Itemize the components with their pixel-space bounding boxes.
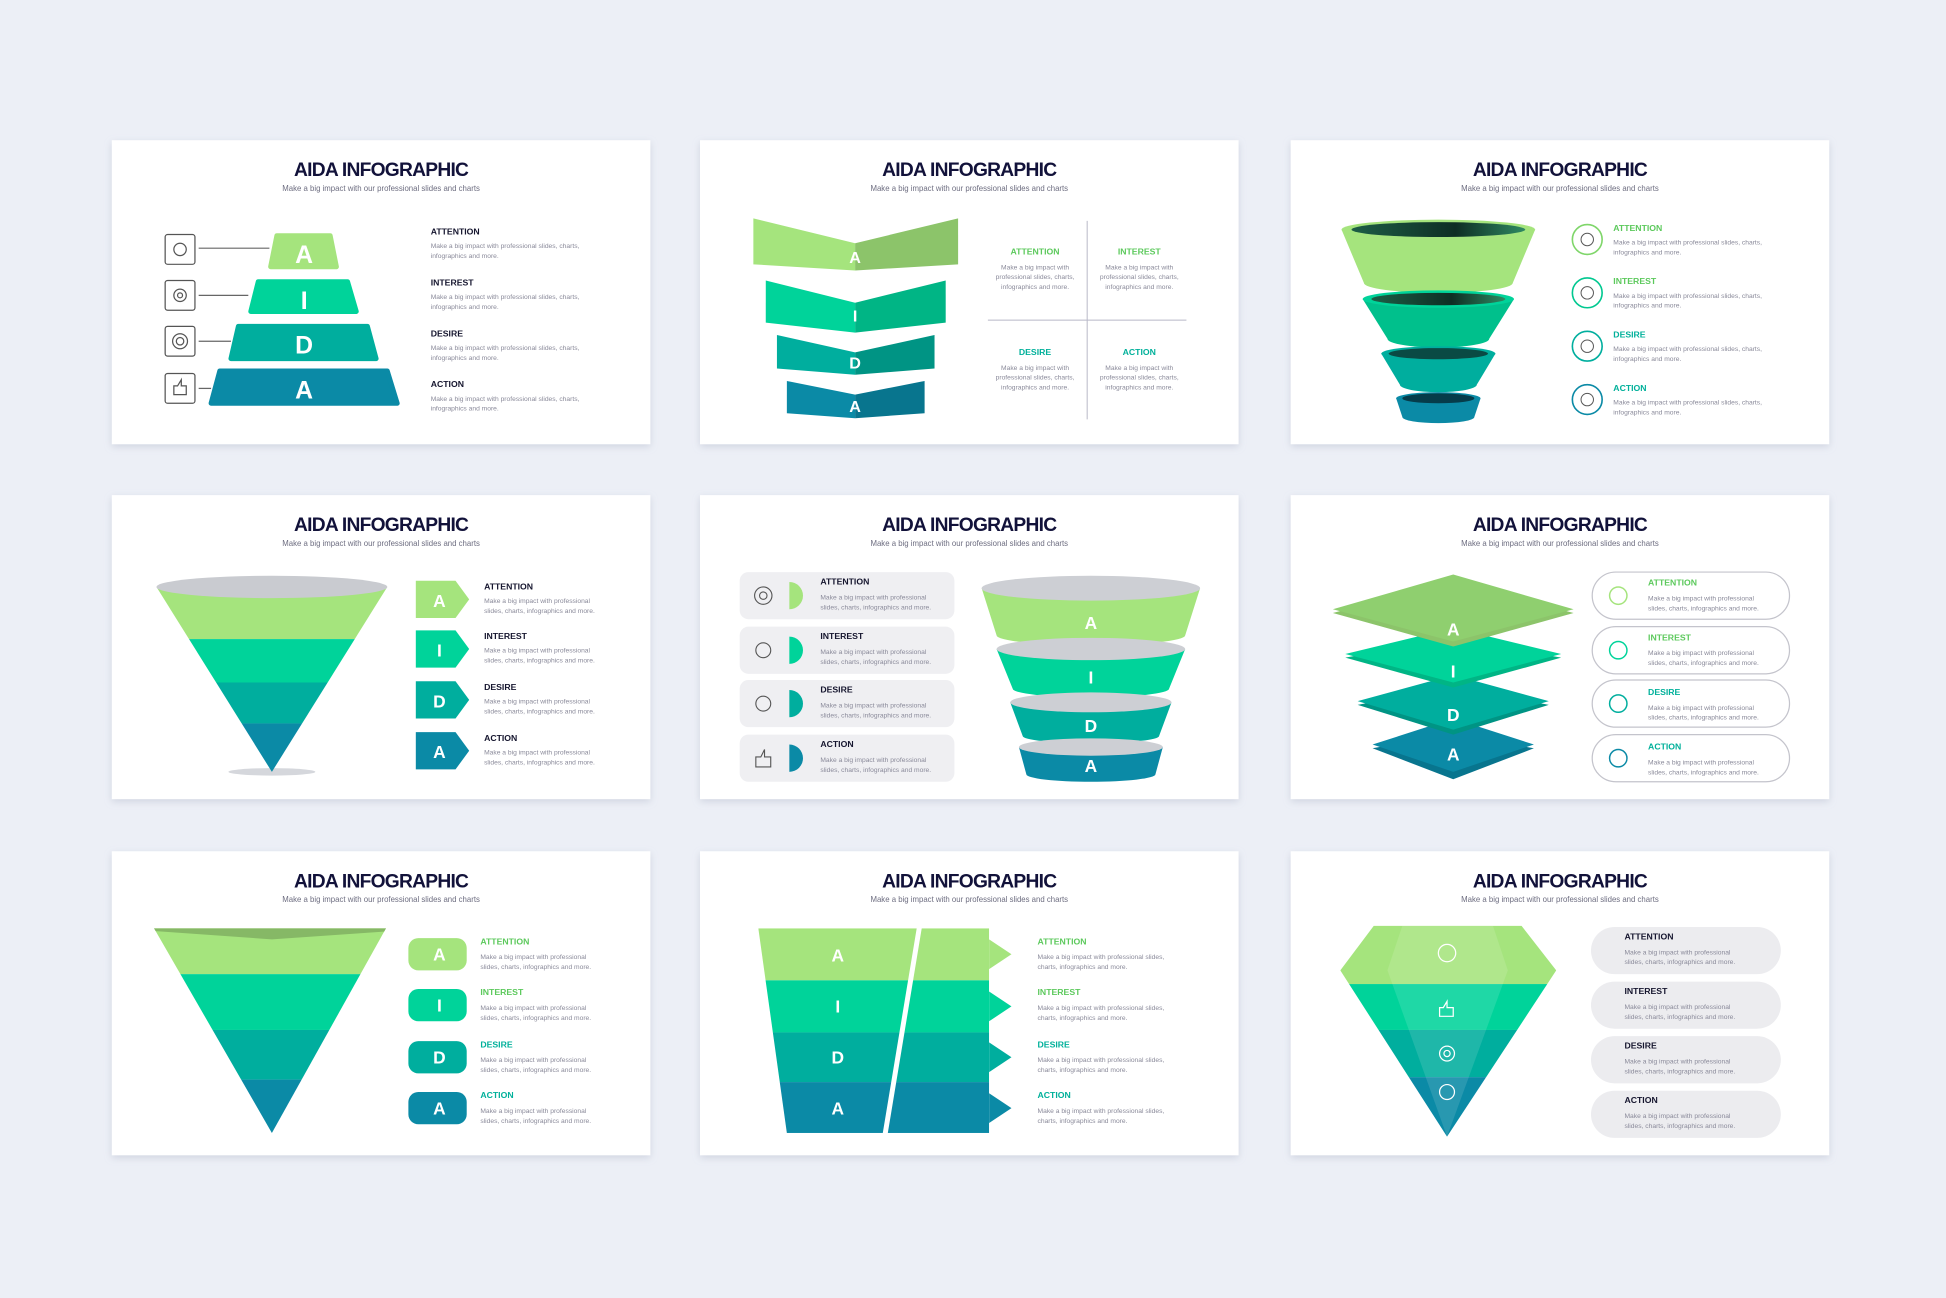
- text list: INTEREST: [484, 631, 528, 641]
- pill list: DESIRE: [1648, 687, 1681, 697]
- text list: ATTENTION: [431, 227, 480, 237]
- diamonds: D: [1447, 705, 1460, 725]
- grid text: Make a big impact with: [1105, 365, 1174, 372]
- text list: ACTION: [431, 379, 464, 389]
- grid text: INTEREST: [1118, 246, 1161, 256]
- subtitle: Make a big impact with our professional slides and charts: [282, 184, 480, 193]
- diamonds: I: [1451, 662, 1456, 682]
- folded bands: D: [849, 355, 861, 373]
- trapezoid with arrows: A: [831, 1098, 844, 1118]
- grid text: [996, 246, 1179, 392]
- subtitle: Make a big impact with our professional slides and charts: [1461, 184, 1659, 193]
- grid text: ACTION: [1123, 347, 1156, 357]
- pyramid layers: A: [295, 242, 313, 269]
- text list: DESIRE: [480, 1039, 513, 1049]
- pill list: slides, charts, infographics and more.: [1648, 660, 1759, 667]
- text list: Make a big impact with professional slides, charts,: [431, 294, 580, 301]
- pill list: INTEREST: [1624, 986, 1668, 996]
- text list: slides, charts, infographics and more.: [484, 759, 595, 766]
- icons and text: Make a big impact with professional slides, charts,: [1613, 400, 1762, 407]
- triangle: [149, 924, 397, 1135]
- subtitle: Make a big impact with our professional slides and charts: [870, 539, 1068, 548]
- diamonds: A: [1447, 619, 1460, 639]
- text list: Make a big impact with professional: [484, 598, 591, 605]
- title: AIDA INFOGRAPHIC: [294, 871, 469, 892]
- text list: slides, charts, infographics and more.: [484, 658, 595, 665]
- cups: [1342, 220, 1535, 423]
- panel: shield: [1291, 851, 1829, 1155]
- text list: DESIRE: [484, 682, 517, 692]
- arrow tags: A: [433, 591, 446, 611]
- disc stack: A: [1085, 756, 1098, 776]
- panel: stacked discs: [700, 495, 1239, 799]
- title: AIDA INFOGRAPHIC: [294, 160, 469, 181]
- text list: ACTION: [484, 733, 517, 743]
- subtitle: Make a big impact with our professional slides and charts: [282, 539, 480, 548]
- text list: infographics and more.: [431, 304, 499, 311]
- diamonds: A: [1447, 745, 1460, 765]
- panel: diamond layers: [1291, 495, 1829, 799]
- pyramid layers: A: [295, 377, 313, 404]
- icons and text: infographics and more.: [1613, 356, 1681, 363]
- text list: ACTION: [480, 1090, 514, 1100]
- text list: INTEREST: [480, 987, 524, 997]
- disc stack: [982, 576, 1200, 782]
- text list: Make a big impact with professional slides, charts,: [431, 243, 580, 250]
- text list: INTEREST: [431, 277, 474, 287]
- tags: A: [433, 944, 446, 964]
- text list: Make a big impact with professional: [480, 954, 587, 961]
- grid text: infographics and more.: [1105, 385, 1173, 392]
- grid lines: [988, 221, 1186, 419]
- text list: Make a big impact with professional slides,: [1038, 1005, 1164, 1012]
- icons and text: infographics and more.: [1613, 303, 1681, 310]
- folded bands: A: [849, 249, 861, 267]
- pill list: slides, charts, infographics and more.: [1624, 1123, 1735, 1130]
- text list: slides, charts, infographics and more.: [484, 608, 595, 615]
- shield: [1334, 923, 1564, 1139]
- pill list: slides, charts, infographics and more.: [1648, 769, 1759, 776]
- pill list: Make a big impact with professional: [1648, 759, 1755, 766]
- text list: infographics and more.: [431, 406, 499, 413]
- panel: cone funnel with arrow tags: [112, 495, 650, 799]
- folded bands: [753, 218, 958, 418]
- rows: slides, charts, infographics and more.: [820, 604, 931, 611]
- pill list: slides, charts, infographics and more.: [1624, 1014, 1735, 1021]
- pill list: ACTION: [1648, 742, 1681, 752]
- grid text: Make a big impact with: [1105, 264, 1174, 271]
- icons and text: infographics and more.: [1613, 249, 1681, 256]
- subtitle: Make a big impact with our professional slides and charts: [1461, 539, 1659, 548]
- title: AIDA INFOGRAPHIC: [1473, 160, 1648, 181]
- subtitle: Make a big impact with our professional slides and charts: [870, 895, 1068, 904]
- rows: INTEREST: [820, 631, 864, 641]
- icons and text: Make a big impact with professional slides, charts,: [1613, 293, 1762, 300]
- pill list: Make a big impact with professional: [1624, 1058, 1731, 1065]
- text list: ATTENTION: [484, 581, 533, 591]
- pill list: ACTION: [1624, 1095, 1658, 1105]
- text list: Make a big impact with professional slides,: [1038, 954, 1164, 961]
- pyramid layers: D: [295, 333, 313, 360]
- subtitle: Make a big impact with our professional slides and charts: [1461, 895, 1659, 904]
- diamonds: [1333, 575, 1574, 779]
- grid text: Make a big impact with: [1001, 264, 1069, 271]
- pill list: DESIRE: [1624, 1041, 1657, 1051]
- grid text: DESIRE: [1019, 347, 1051, 357]
- rows: [740, 572, 954, 782]
- icons and text: DESIRE: [1613, 330, 1646, 340]
- pill list: slides, charts, infographics and more.: [1648, 606, 1759, 613]
- text list: charts, infographics and more.: [1038, 1118, 1128, 1125]
- text list: slides, charts, infographics and more.: [480, 1118, 591, 1125]
- text list: DESIRE: [431, 328, 463, 338]
- panel: 3D cups: [1291, 140, 1829, 444]
- grid text: ATTENTION: [1011, 246, 1060, 256]
- text list: slides, charts, infographics and more.: [480, 1015, 591, 1022]
- pill list: slides, charts, infographics and more.: [1624, 959, 1735, 966]
- title: AIDA INFOGRAPHIC: [882, 160, 1057, 181]
- text list: INTEREST: [1038, 987, 1081, 997]
- panel: pyramid: [112, 140, 650, 444]
- text list: Make a big impact with professional: [484, 749, 591, 756]
- arrow tags: D: [433, 691, 446, 711]
- arrow tags: [416, 581, 469, 769]
- icons and text: Make a big impact with professional slides, charts,: [1613, 346, 1762, 353]
- cone: [149, 576, 397, 776]
- panel: inverted triangle: [112, 851, 650, 1155]
- pill list: ATTENTION: [1624, 931, 1673, 941]
- disc stack: D: [1085, 716, 1097, 736]
- text list: slides, charts, infographics and more.: [480, 1067, 591, 1074]
- text list: Make a big impact with professional: [480, 1005, 587, 1012]
- arrow tags: A: [433, 742, 446, 762]
- text list: [484, 581, 595, 766]
- rows: slides, charts, infographics and more.: [820, 659, 931, 666]
- grid text: Make a big impact with: [1001, 365, 1069, 372]
- grid text: professional slides, charts,: [996, 375, 1075, 382]
- pill list: Make a big impact with professional: [1648, 596, 1755, 603]
- icons column: [165, 235, 269, 403]
- pill list: [1592, 572, 1790, 782]
- text list: Make a big impact with professional slides,: [1038, 1108, 1164, 1115]
- icons and text: ACTION: [1613, 383, 1647, 393]
- rows: Make a big impact with professional: [820, 757, 927, 764]
- icons and text: Make a big impact with professional slides, charts,: [1613, 239, 1762, 246]
- tags: [408, 938, 467, 1124]
- title: AIDA INFOGRAPHIC: [294, 515, 469, 536]
- subtitle: Make a big impact with our professional slides and charts: [870, 184, 1068, 193]
- text list: slides, charts, infographics and more.: [484, 709, 595, 716]
- text list: slides, charts, infographics and more.: [480, 964, 591, 971]
- folded bands: A: [849, 398, 861, 416]
- icons and text: [1572, 223, 1762, 416]
- pill list: [1591, 927, 1781, 1138]
- text list: Make a big impact with professional: [484, 648, 591, 655]
- text list: charts, infographics and more.: [1038, 964, 1128, 971]
- arrow tags: I: [437, 640, 442, 660]
- title: AIDA INFOGRAPHIC: [1473, 871, 1648, 892]
- text list: [431, 227, 580, 413]
- pill list: INTEREST: [1648, 632, 1692, 642]
- text list: Make a big impact with professional: [484, 699, 591, 706]
- pill list: slides, charts, infographics and more.: [1648, 715, 1759, 722]
- tags: D: [433, 1047, 446, 1067]
- text list: [480, 936, 591, 1125]
- pill list: Make a big impact with professional: [1624, 1004, 1731, 1011]
- disc stack: A: [1085, 613, 1098, 633]
- text list: Make a big impact with professional slides, charts,: [431, 396, 580, 403]
- text list: ATTENTION: [1038, 936, 1087, 946]
- trapezoid with arrows: I: [835, 997, 840, 1017]
- title: AIDA INFOGRAPHIC: [1473, 515, 1648, 536]
- rows: ATTENTION: [820, 576, 869, 586]
- rows: slides, charts, infographics and more.: [820, 712, 931, 719]
- pill list: Make a big impact with professional: [1648, 705, 1755, 712]
- rows: DESIRE: [820, 684, 853, 694]
- tags: I: [437, 995, 442, 1015]
- text list: Make a big impact with professional: [480, 1108, 587, 1115]
- text list: charts, infographics and more.: [1038, 1067, 1128, 1074]
- panel: folded bands: [700, 140, 1239, 444]
- grid text: professional slides, charts,: [1100, 274, 1179, 281]
- pyramid layers: [211, 236, 397, 404]
- text list: infographics and more.: [431, 253, 499, 260]
- rows: slides, charts, infographics and more.: [820, 767, 931, 774]
- trapezoid with arrows: A: [831, 946, 844, 966]
- text list: Make a big impact with professional slides,: [1038, 1057, 1164, 1064]
- disc stack: I: [1088, 668, 1093, 688]
- trapezoid with arrows: [745, 926, 1011, 1135]
- text list: Make a big impact with professional slides, charts,: [431, 345, 580, 352]
- title: AIDA INFOGRAPHIC: [882, 871, 1057, 892]
- grid text: infographics and more.: [1001, 284, 1069, 291]
- pyramid layers: I: [301, 288, 308, 315]
- panel: split trapezoid with arrows: [700, 851, 1239, 1155]
- grid text: infographics and more.: [1001, 385, 1069, 392]
- text list: ATTENTION: [480, 936, 529, 946]
- text list: charts, infographics and more.: [1038, 1015, 1128, 1022]
- rows: Make a big impact with professional: [820, 702, 927, 709]
- grid text: infographics and more.: [1105, 284, 1173, 291]
- pill list: slides, charts, infographics and more.: [1624, 1068, 1735, 1075]
- icons and text: INTEREST: [1613, 276, 1657, 286]
- subtitle: Make a big impact with our professional slides and charts: [282, 895, 480, 904]
- title: AIDA INFOGRAPHIC: [882, 515, 1057, 536]
- pill list: Make a big impact with professional: [1624, 949, 1731, 956]
- rows: Make a big impact with professional: [820, 649, 927, 656]
- text list: ACTION: [1038, 1090, 1071, 1100]
- pill list: Make a big impact with professional: [1648, 650, 1755, 657]
- text list: [1038, 936, 1164, 1125]
- folded bands: I: [853, 307, 857, 325]
- grid text: professional slides, charts,: [996, 274, 1075, 281]
- grid text: professional slides, charts,: [1100, 375, 1179, 382]
- text list: DESIRE: [1038, 1039, 1070, 1049]
- trapezoid with arrows: D: [831, 1047, 844, 1067]
- icons and text: infographics and more.: [1613, 409, 1681, 416]
- pill list: Make a big impact with professional: [1624, 1113, 1731, 1120]
- text list: infographics and more.: [431, 355, 499, 362]
- pill list: ATTENTION: [1648, 578, 1697, 588]
- rows: ACTION: [820, 739, 854, 749]
- text list: Make a big impact with professional: [480, 1057, 587, 1064]
- icons and text: ATTENTION: [1613, 223, 1662, 233]
- rows: Make a big impact with professional: [820, 594, 927, 601]
- tags: A: [433, 1098, 446, 1118]
